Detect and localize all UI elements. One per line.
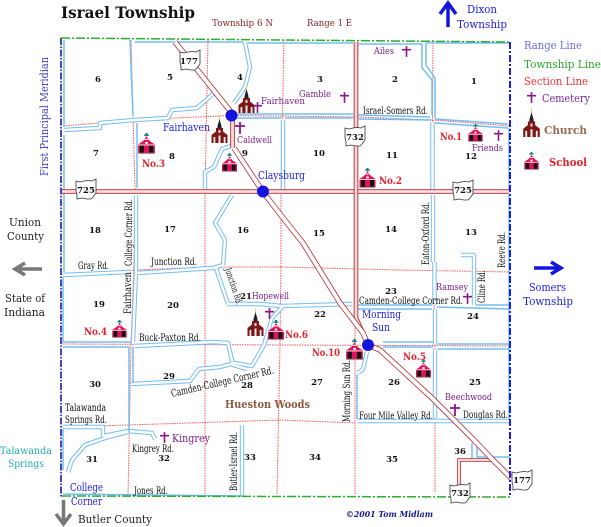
label: State of Indiana: State of: [5, 291, 46, 305]
section numbers: 36: [454, 447, 466, 457]
state route 725: [62, 189, 509, 194]
school: No.4: [112, 320, 127, 338]
town labels: Sun: [372, 320, 390, 334]
section numbers: 10: [313, 149, 325, 159]
township and range labels: Range 1 E: [307, 18, 352, 29]
cemetery labels: Gamble: [299, 89, 331, 100]
town labels: Corner: [71, 494, 102, 508]
section numbers: 6: [95, 75, 101, 85]
state route 177: [175, 42, 512, 479]
town dot: Morning Sun: [362, 339, 374, 351]
town labels: College: [70, 480, 103, 494]
section numbers: 26: [388, 378, 400, 388]
arrow: west: [15, 263, 42, 275]
park label: Hueston Woods: Hueston Woods: [225, 398, 310, 411]
section numbers: [86, 73, 481, 465]
town dot: Fairhaven: [226, 110, 238, 122]
school labels: No.5: [403, 351, 426, 363]
section numbers: 23: [385, 287, 397, 297]
school: No.5: [416, 359, 431, 378]
shield: 732 north: [345, 126, 365, 146]
label: Talawanda Springs: [0, 445, 52, 470]
shield: 177 southeast: 177: [513, 476, 531, 486]
label: State of Indiana: [4, 291, 46, 319]
shield: 732 north: 732: [346, 133, 364, 143]
school: No.2: [360, 168, 376, 188]
town labels: Fairhaven: [163, 120, 210, 134]
school: No.3: [138, 133, 155, 154]
section numbers: 14: [385, 225, 397, 235]
cemetery labels: Ailes: [373, 46, 394, 57]
road names: Springs Rd.: [65, 414, 107, 426]
town labels: Morning: [362, 307, 401, 321]
legend: Range Line: [524, 39, 582, 52]
cemetery labels: Friends: [472, 143, 503, 154]
cemetery labels: Hopewell: [252, 291, 289, 302]
shield: 725 west: 725: [77, 186, 95, 196]
cemetery labels: Fairhaven: [261, 96, 305, 107]
road names: Talawanda: [65, 402, 106, 414]
section numbers: 18: [89, 226, 101, 236]
section numbers: 35: [386, 455, 398, 465]
cemetery labels: Ramsey: [436, 282, 469, 293]
road names: Kingrey Rd.: [132, 443, 174, 455]
section numbers: 12: [465, 152, 477, 162]
section numbers: 3: [317, 75, 323, 85]
road names: Israel-Somers Rd.: [363, 105, 428, 117]
road names: Morning Sun Rd.: [341, 360, 353, 422]
section numbers: 1: [471, 77, 477, 87]
state route 732: [356, 42, 492, 485]
school labels: No.3: [142, 158, 165, 170]
town labels: [70, 120, 401, 508]
label: Union County: Union: [9, 215, 42, 229]
section numbers: 22: [314, 310, 326, 320]
shield: 732 south: 732: [451, 489, 469, 499]
section numbers: 17: [164, 225, 176, 235]
township line south: [62, 496, 510, 497]
shield: 725 east: 725: [454, 186, 472, 196]
road names: Douglas Rd.: [463, 409, 508, 421]
section numbers: 2: [392, 75, 398, 85]
arrow: north: [440, 3, 456, 27]
church: Hopewell: [248, 308, 264, 336]
road names: Gray Rd.: [78, 260, 109, 272]
shield: 177 north: [180, 50, 200, 70]
road names: Eaton-Oxford Rd.: [420, 202, 432, 265]
township and range labels: [212, 18, 352, 29]
school labels: [84, 131, 462, 363]
label: Union County: County: [7, 229, 44, 243]
label: Talawanda Springs: Springs: [8, 458, 44, 470]
road names: Butler-Israel Rd.: [228, 432, 240, 491]
legend: School: [549, 156, 587, 169]
section numbers: 31: [86, 455, 98, 465]
section numbers: 29: [163, 372, 175, 382]
school: No.10: [346, 339, 363, 360]
legend: Cemetery: [542, 92, 591, 105]
school: No.6: [268, 320, 284, 340]
town labels: Claysburg: [258, 168, 306, 182]
label: Union County: [7, 215, 44, 243]
road names: Reeve Rd.: [496, 232, 508, 268]
section lines: [62, 40, 510, 495]
cemetery crosses: [160, 46, 536, 443]
arrow: east: [534, 262, 561, 274]
section numbers: 9: [242, 149, 248, 159]
road network: [63, 40, 510, 497]
road names: Junction Rd.: [222, 266, 243, 306]
first principal meridian label: First Principal Meridian: [38, 57, 51, 176]
school labels: No.6: [285, 329, 308, 341]
label: Dixon Township: [457, 2, 507, 31]
range line east: [509, 42, 511, 497]
section numbers: 5: [167, 73, 173, 83]
township line north: [61, 38, 510, 42]
road names: College Corner Rd.: [123, 199, 135, 266]
label: Talawanda Springs: Talawanda: [0, 445, 52, 457]
school labels: No.1: [440, 131, 462, 143]
road names: Fairhaven: [122, 272, 134, 314]
road names: Four Mile Valley Rd.: [359, 410, 433, 422]
section numbers: 19: [93, 300, 105, 310]
label: Dixon Township: Township: [457, 17, 507, 31]
shield: 725 west: [76, 179, 96, 199]
church: Caldwell: [212, 115, 228, 143]
church: Fairhaven: [238, 85, 254, 113]
school labels: No.10: [312, 347, 340, 359]
church: legend: [523, 108, 540, 137]
label: Butler County: Butler County: [78, 512, 152, 526]
cemetery labels: [172, 46, 503, 445]
legend: Church: [544, 124, 587, 137]
section numbers: 13: [465, 228, 477, 238]
road names: [65, 105, 508, 497]
cemetery labels: Kingrey: [172, 431, 210, 445]
school: legend: [524, 152, 539, 170]
school labels: No.2: [379, 175, 402, 187]
section numbers: 33: [244, 453, 256, 463]
label: State of Indiana: Indiana: [4, 305, 45, 319]
legend: [524, 39, 601, 169]
section numbers: 20: [167, 301, 179, 311]
section numbers: 34: [309, 453, 321, 463]
road names: Buck-Paxton Rd.: [139, 332, 201, 344]
label: Somers Township: Township: [523, 294, 573, 308]
legend: Section Line: [524, 75, 588, 88]
town dot: Claysburg: [257, 186, 269, 198]
section numbers: 8: [169, 152, 175, 162]
section numbers: 28: [241, 381, 253, 391]
section numbers: 32: [158, 454, 170, 464]
shield: 177 north: 177: [180, 57, 198, 67]
section numbers: 27: [311, 378, 323, 388]
section numbers: 11: [386, 151, 398, 161]
title: Israel Township: [61, 3, 195, 22]
section numbers: 30: [89, 380, 101, 390]
school labels: No.4: [84, 326, 107, 338]
label: Dixon Township: Dixon: [467, 2, 498, 16]
section numbers: 16: [237, 226, 249, 236]
copyright: ©2001 Tom Midlam: [346, 510, 433, 520]
section numbers: 4: [237, 73, 243, 83]
label: Somers Township: [523, 280, 573, 308]
cemetery labels: Caldwell: [237, 135, 272, 146]
section numbers: 15: [313, 229, 325, 239]
township and range labels: Township 6 N: [212, 18, 273, 29]
section numbers: 25: [469, 378, 481, 388]
section numbers: 24: [467, 312, 479, 322]
section numbers: 7: [93, 149, 99, 159]
road names: Cline Rd.: [476, 270, 488, 303]
school: section 9: [222, 153, 237, 172]
road names: Camden-College Corner Rd.: [170, 365, 275, 400]
range line west: first principal meridian: [60, 38, 62, 497]
shield: 725 east: [453, 180, 473, 200]
school: No.1: [468, 124, 483, 142]
road names: Jones Rd.: [133, 485, 168, 497]
shield: 732 south: [450, 483, 470, 503]
road names: Junction Rd.: [150, 256, 197, 268]
label: Somers Township: Somers: [529, 280, 566, 294]
road names: Camden-College Corner Rd.: [359, 295, 463, 307]
shield: 177 southeast: [512, 470, 532, 490]
cemetery labels: Beechwood: [445, 392, 492, 403]
arrow: south: [56, 500, 71, 524]
section numbers: 21: [240, 292, 252, 302]
